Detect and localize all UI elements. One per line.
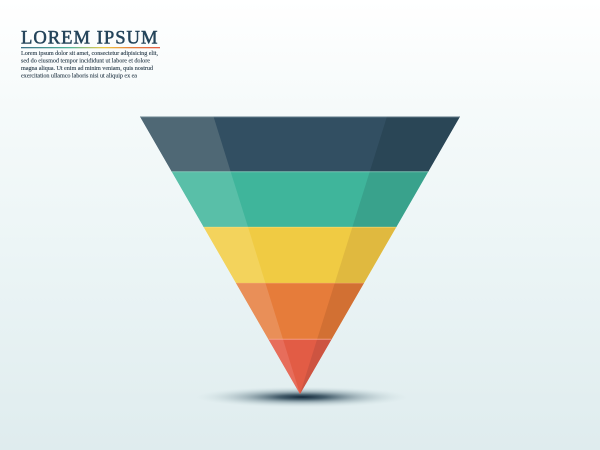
- band 2: teal: [172, 172, 428, 227]
- description text: exercitation ullamco laboris nisi ut aliquip ex ea: [21, 72, 137, 79]
- ground shadow: [194, 386, 410, 408]
- description text: magna aliqua. Ut enim ad minim veniam, quis nostrud: [21, 65, 154, 72]
- band 5: red tip: [268, 339, 332, 394]
- title rule: [21, 47, 160, 48]
- band 1: navy: [140, 116, 460, 172]
- band 3: yellow: [204, 227, 396, 283]
- band 4: orange: [236, 283, 364, 339]
- description text: Lorem ipsum dolor sit amet, consectetur adipisicing elit,: [21, 50, 158, 57]
- title: LOREM IPSUM: [21, 28, 158, 48]
- funnel: [140, 116, 460, 394]
- description text: sed do eiusmod tempor incididunt ut labore et dolore: [21, 58, 150, 65]
- description text: [21, 50, 158, 79]
